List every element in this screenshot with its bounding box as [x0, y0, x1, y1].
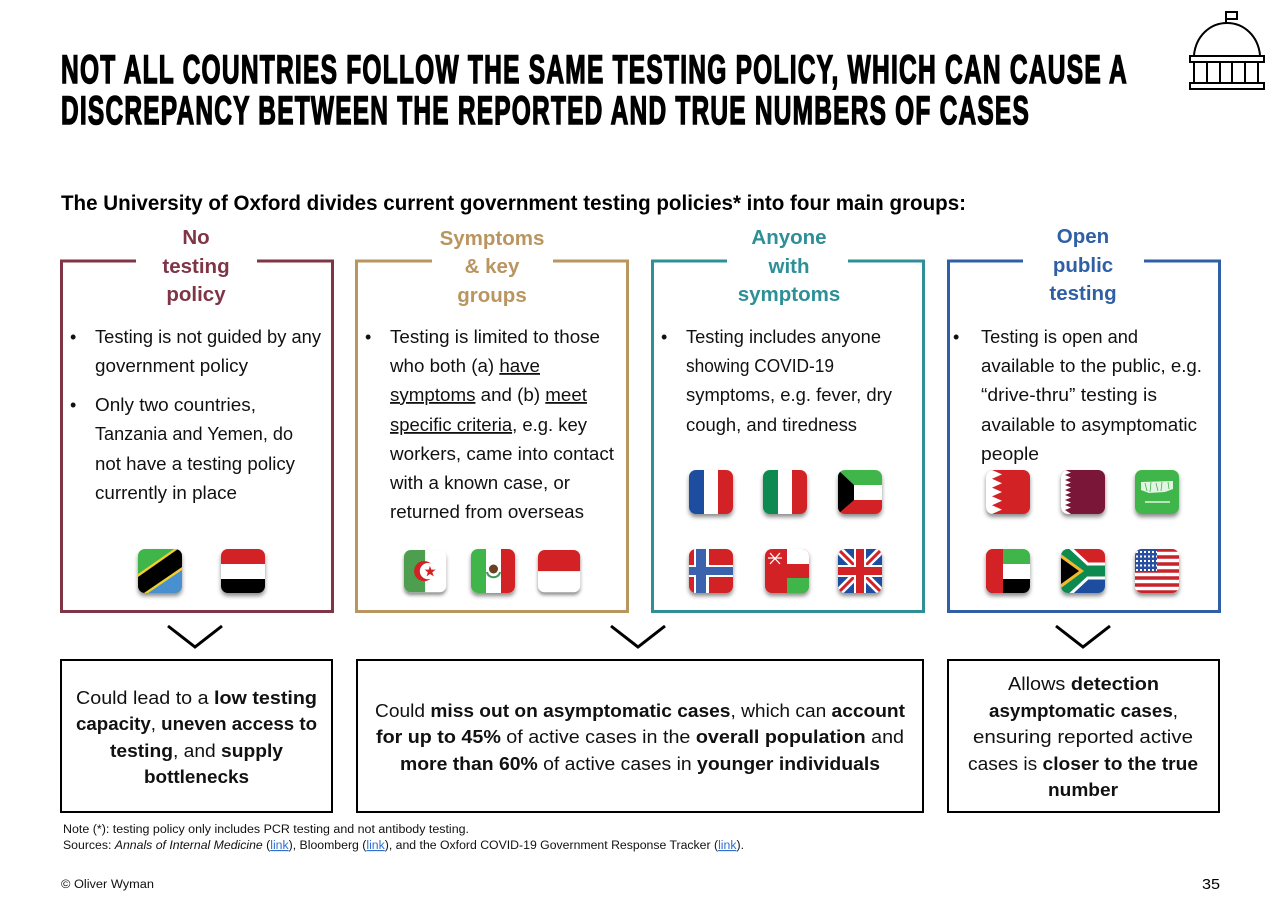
callout: low testing capacity: testing, and supply: [110, 740, 284, 761]
icon: flag of Saudi Arabia: [1135, 470, 1179, 514]
bullet list: currently in place: [95, 483, 237, 503]
heading: anyone with symptoms: [738, 226, 840, 306]
icon: flag of the United States: [1135, 549, 1179, 593]
heading: anyone with symptoms: with: [768, 255, 810, 278]
panel: symptoms and key groups: [356, 227, 628, 612]
footnote and sources: Note (*): testing policy only includes PCR testing and not antibody testing.: [63, 824, 469, 836]
bullet list: available to asymptomatic: [981, 415, 1197, 435]
icon: flag of Bahrain: [986, 470, 1030, 514]
callout: low testing capacity: [61, 660, 332, 812]
callout: detection of asymptomatic cases: number: [1048, 779, 1119, 800]
footnote and sources: Sources: Annals of Internal Medicine (link), Bloomberg ( link), and the Oxford COVID-19 Government Response Tracker ( link).: [63, 840, 744, 852]
bullet list: Testing is not guided by any: [95, 327, 321, 347]
icon: government dome: [1190, 12, 1264, 89]
bullet list: “drive-thru” testing is: [981, 385, 1157, 405]
heading: symptoms and key groups: [440, 227, 544, 307]
heading: open public testing: [1049, 225, 1117, 305]
icon: flag of South Africa: [1057, 545, 1105, 597]
footnote and sources: [63, 824, 744, 852]
icon: flag of Norway: [689, 549, 733, 593]
arrow: chevron to first outcome: [168, 626, 222, 647]
icon: flag of Oman: [765, 549, 809, 593]
bullet list: available to the public, e.g.: [981, 356, 1202, 376]
bullet list: Tanzania and Yemen, do: [95, 424, 293, 444]
heading: no testing policy: testing: [162, 255, 230, 278]
bullet list: [70, 327, 321, 503]
icon: flag of Italy: [763, 470, 807, 514]
callout: low testing capacity: Could lead to a low testing: [76, 687, 317, 708]
heading: anyone with symptoms: Anyone: [751, 226, 827, 249]
callout: detection of asymptomatic cases: Allows detection: [1008, 673, 1159, 694]
callout: missed asymptomatic cases: more than 60% of active cases in younger individuals: [400, 753, 880, 774]
icon: flag of the UAE: [986, 549, 1030, 593]
heading: symptoms and key groups: groups: [457, 284, 527, 307]
bullet list: Only two countries,: [95, 395, 256, 415]
arrow: chevron to second outcome: [611, 626, 665, 647]
heading: symptoms and key groups: & key: [465, 255, 520, 278]
panel: no testing policy: [62, 226, 332, 612]
bullet list: [365, 327, 614, 522]
bullet list: who both (a) have: [389, 356, 540, 376]
callout: detection of asymptomatic cases: asymptomatic cases,: [989, 700, 1178, 721]
bullet list: showing COVID-19: [686, 356, 834, 376]
icon: flag of Kuwait: [838, 470, 882, 514]
subtitle: The University of Oxford divides current government testing policies* into four main groups:: [61, 192, 966, 215]
callout: detection of asymptomatic cases: [948, 660, 1219, 812]
callout: detection of asymptomatic cases: cases is closer to the true: [968, 753, 1198, 774]
bullet list: [953, 327, 1202, 464]
bullet list: symptoms, e.g. fever, dry: [686, 385, 892, 405]
bullet list: specific criteria, e.g. key: [390, 415, 587, 435]
panel border: [948, 261, 1220, 612]
bullet list: Testing is limited to those: [390, 327, 600, 347]
copyright: © Oliver Wyman: [61, 879, 154, 891]
icon: flag of Algeria: [404, 550, 446, 592]
panel: open public testing: [948, 225, 1220, 612]
bullet list: •: [661, 327, 667, 347]
callout: low testing capacity: capacity, uneven access to: [76, 713, 317, 734]
icon: flag of France: [689, 470, 733, 514]
heading: symptoms and key groups: Symptoms: [440, 227, 544, 250]
title: [61, 48, 1128, 133]
callout: missed asymptomatic cases: for up to 45% of active cases in the overall population and: [376, 726, 904, 747]
heading: open public testing: public: [1053, 254, 1113, 277]
callout: missed asymptomatic cases: Could miss out on asymptomatic cases , which can account: [375, 700, 906, 721]
heading: anyone with symptoms: symptoms: [738, 283, 840, 306]
icon: flag of the United Kingdom: [838, 549, 882, 593]
bullet list: government policy: [95, 356, 248, 376]
bullet list: returned from overseas: [390, 502, 584, 522]
icon: flag of Mexico: [471, 549, 515, 593]
bullet list: Testing is open and: [981, 327, 1138, 347]
icon: flag of Qatar: [1061, 470, 1105, 514]
bullet list: symptoms and (b) meet: [390, 385, 587, 405]
bullet list: •: [70, 395, 76, 415]
bullet list: Testing includes anyone: [686, 327, 881, 347]
icon: flag of Yemen: [221, 549, 265, 593]
panel border: [356, 261, 628, 612]
panel: anyone with symptoms: [652, 226, 924, 612]
heading: no testing policy: policy: [166, 283, 226, 306]
bullet list: cough, and tiredness: [686, 415, 857, 435]
panel border: [62, 261, 332, 612]
heading: open public testing: Open: [1057, 225, 1109, 248]
icon: flag of Tanzania: [138, 549, 182, 593]
bullet list: •: [70, 327, 76, 347]
arrow: chevron to third outcome: [1056, 626, 1110, 647]
bullet list: workers, came into contact: [389, 444, 614, 464]
panel border: [652, 261, 924, 612]
bullet list: [661, 327, 892, 435]
callout: low testing capacity: bottlenecks: [144, 766, 249, 787]
bullet list: with a known case, or: [389, 473, 570, 493]
heading: open public testing: testing: [1049, 282, 1117, 305]
bullet list: •: [953, 327, 959, 347]
page number: 35: [1202, 876, 1220, 893]
heading: no testing policy: [162, 226, 230, 306]
callout: missed asymptomatic cases: [357, 660, 923, 812]
callout: detection of asymptomatic cases: ensuring reported active: [973, 726, 1193, 747]
bullet list: not have a testing policy: [95, 454, 295, 474]
heading: no testing policy: No: [182, 226, 210, 249]
icon: flag of Indonesia: [538, 550, 580, 592]
bullet list: •: [365, 327, 371, 347]
bullet list: people: [981, 444, 1039, 464]
